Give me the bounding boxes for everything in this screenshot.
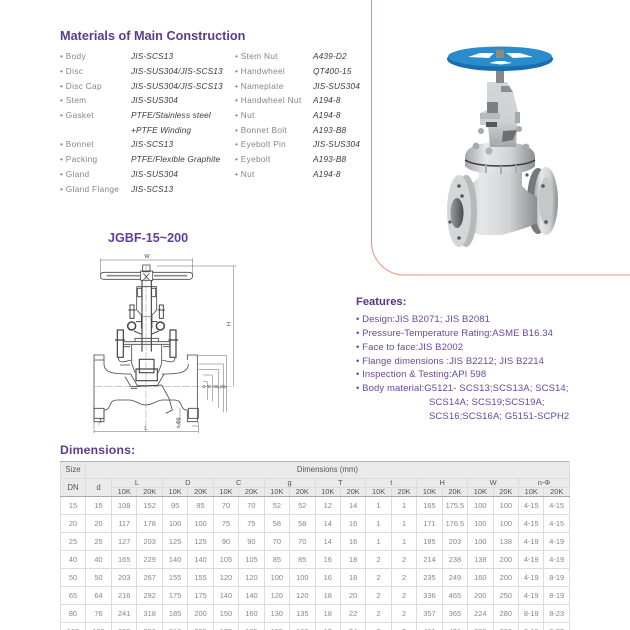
table: dimensions: 50 xyxy=(94,573,103,582)
table: dimensions: 75 xyxy=(247,519,256,528)
table: dimensions: 140 xyxy=(169,555,181,564)
table: dimensions: 10K xyxy=(169,488,182,496)
list: materials right column: • Nut xyxy=(235,110,255,120)
table: dimensions: 25 xyxy=(69,537,77,546)
list: materials left column: JIS-SCS13 xyxy=(131,184,173,194)
table: dimensions: 4-15 xyxy=(549,519,564,528)
table: dimensions: 10K xyxy=(372,488,385,496)
table: dimensions: 203 xyxy=(143,537,156,546)
table: dimensions: 76 xyxy=(94,609,103,618)
list: materials left column: • Gasket xyxy=(60,110,94,120)
table: dimensions: 20K xyxy=(550,488,563,496)
left flange xyxy=(447,175,477,247)
table: dimensions: 16 xyxy=(324,573,332,582)
table: dimensions: 15 xyxy=(69,501,77,510)
table: dimensions: 125 xyxy=(194,537,207,546)
table: dimensions: 70 xyxy=(247,501,256,510)
list: materials right column: A194-8 xyxy=(313,94,341,104)
table: dimensions: 105 xyxy=(220,555,232,564)
table: dimensions: 2 xyxy=(377,609,381,618)
table: dimensions: d xyxy=(96,483,101,492)
table: dimensions: 200 xyxy=(500,555,512,564)
table: dimensions: 4-15 xyxy=(524,519,539,528)
table: dimensions: 95 xyxy=(196,501,205,510)
table: dimensions: 365 xyxy=(449,609,461,618)
list: materials right column: A439-D2 xyxy=(313,50,347,60)
table: dimensions: 14 xyxy=(349,501,357,510)
table: dimensions: C xyxy=(236,478,241,487)
table: dimensions: 2 xyxy=(402,573,406,582)
table: dimensions: 90 xyxy=(247,537,256,546)
table: dimensions: 64 xyxy=(94,591,103,600)
table: dimensions: 100 xyxy=(474,519,487,528)
dimension labels: o xyxy=(202,385,208,388)
table: dimensions: t xyxy=(390,478,392,487)
list: materials left column: JIS-SUS304/JIS-SCS13 xyxy=(131,66,223,76)
table: dimensions: 175 xyxy=(194,591,207,600)
table: dimensions: 20K xyxy=(143,488,156,496)
table: dimensions: DN xyxy=(67,483,79,492)
table: dimensions: 108 xyxy=(118,501,130,510)
panel: product photo frame xyxy=(371,0,630,276)
table: dimensions: 20K xyxy=(347,488,360,496)
table: dimensions: 1 xyxy=(402,501,406,510)
list: materials left column: • Bonnet xyxy=(60,138,94,148)
table: dimensions: 10K xyxy=(270,488,283,496)
table: dimensions: 100 xyxy=(474,537,487,546)
list: materials left column: • Body xyxy=(60,50,86,60)
table: dimensions: 100 xyxy=(169,519,181,528)
table: dimensions: 20K xyxy=(245,488,258,496)
right flange xyxy=(525,167,558,235)
list: features: • Pressure-Temperature Rating:ASME B16.34 xyxy=(356,328,553,339)
dimension labels: L xyxy=(144,426,148,432)
table: dimensions: 40 xyxy=(69,555,77,564)
table: dimensions: 1 xyxy=(402,537,406,546)
table: dimensions: 10K xyxy=(219,488,233,496)
list: materials left column: • Stem xyxy=(60,94,86,104)
table: dimensions: 155 xyxy=(169,573,181,582)
list: materials right column: • Handwheel Nut xyxy=(235,94,301,104)
table: dimensions: 10K xyxy=(118,488,131,496)
table: dimensions: 4-19 xyxy=(549,555,564,564)
table: dimensions: 1 xyxy=(377,501,381,510)
table: dimensions: 1 xyxy=(377,519,381,528)
table: dimensions: Size xyxy=(65,465,81,474)
dimension labels: g xyxy=(212,385,218,388)
table: dimensions: 52 xyxy=(298,501,306,510)
table: dimensions: 10K xyxy=(525,488,538,496)
table: dimensions: 80 xyxy=(69,609,77,618)
list: materials right column: • Eyebolt xyxy=(235,154,271,164)
bonnet flange xyxy=(465,142,535,174)
table: dimensions: 16 xyxy=(349,519,357,528)
list: features: SCS16;SCS16A; G5151-SCPH2 xyxy=(429,411,569,422)
list: materials left column: • Disc Cap xyxy=(60,80,102,90)
table: dimensions: 20 xyxy=(94,519,103,528)
table: dimensions: 175.5 xyxy=(446,501,464,510)
table: dimensions: 18 xyxy=(349,573,357,582)
table: dimensions: 20K xyxy=(499,488,512,496)
table: dimensions: 165 xyxy=(118,555,130,564)
table: dimensions: 203 xyxy=(449,537,461,546)
dimension labels: g xyxy=(175,417,181,420)
bonnet xyxy=(115,330,178,373)
table: dimensions: 4-15 xyxy=(549,501,564,510)
table: dimensions: 18 xyxy=(324,591,332,600)
table: dimensions: 58 xyxy=(273,519,281,528)
table: dimensions: 165 xyxy=(423,501,436,510)
heading: model name: JGBF-15~200 xyxy=(108,231,188,245)
list: materials left column: +PTFE Winding xyxy=(131,124,191,134)
list: materials right column: • Nameplate xyxy=(235,80,284,90)
heading: features: Features: xyxy=(356,296,406,308)
list: materials right column: • Nut xyxy=(235,168,255,178)
packing xyxy=(136,359,157,381)
table: dimensions: H xyxy=(440,478,445,487)
table: dimensions: 216 xyxy=(118,591,130,600)
table: dimensions: 50 xyxy=(69,573,77,582)
table: dimensions: 70 xyxy=(222,501,230,510)
table: dimensions: 200 xyxy=(500,573,512,582)
table: dimensions: 2 xyxy=(402,591,406,600)
table: dimensions: 58 xyxy=(298,519,306,528)
table: dimensions: 10K xyxy=(474,488,487,496)
table: dimensions: 150 xyxy=(220,609,232,618)
dimension labels: W xyxy=(144,254,150,260)
stem xyxy=(496,68,504,83)
table: dimensions: 100 xyxy=(500,501,512,510)
table: dimensions: 250 xyxy=(500,591,512,600)
table: dimensions: 2 xyxy=(402,555,406,564)
table: dimensions: 100 xyxy=(271,573,283,582)
heading: materials: Materials of Main Construction xyxy=(60,29,245,43)
table: dimensions: 100 xyxy=(194,519,207,528)
table: dimensions: 8-23 xyxy=(549,609,564,618)
table: dimensions: 200 xyxy=(474,591,487,600)
table: dimensions: 185 xyxy=(423,537,436,546)
table: dimensions: 20K xyxy=(296,488,309,496)
table: dimensions: 140 xyxy=(194,555,207,564)
list: materials right column: A194-8 xyxy=(313,168,341,178)
table: dimensions: 4-15 xyxy=(524,501,539,510)
table: dimensions: 138 xyxy=(500,537,512,546)
table: dimensions: 20 xyxy=(349,591,357,600)
table: dimensions: 130 xyxy=(271,609,283,618)
table: dimensions: 125 xyxy=(169,537,181,546)
table: dimensions: 185 xyxy=(169,609,181,618)
table: dimensions: 90 xyxy=(222,537,230,546)
table: dimensions: 65 xyxy=(69,591,77,600)
technical drawing xyxy=(94,254,237,434)
list: materials left column: • Gland xyxy=(60,168,89,178)
list: materials left column: • Gland Flange xyxy=(60,184,119,194)
table: dimensions: 100 xyxy=(474,501,487,510)
yoke xyxy=(478,82,522,147)
table: dimensions: 95 xyxy=(171,501,179,510)
table: dimensions: 357 xyxy=(423,609,436,618)
table: dimensions: 10K xyxy=(321,488,334,496)
table: dimensions: 14 xyxy=(324,537,332,546)
list: materials left column: • Packing xyxy=(60,154,97,164)
list: features: • Flange dimensions :JIS B2212; JIS B2214 xyxy=(356,356,544,367)
dimension labels: T xyxy=(99,419,102,425)
list: materials left column: PTFE/Stainless steel xyxy=(131,110,211,120)
table: dimensions: 52 xyxy=(273,501,281,510)
table: dimensions: 120 xyxy=(271,591,283,600)
table: dimensions: 152 xyxy=(143,501,156,510)
table: dimensions: 214 xyxy=(423,555,436,564)
table: dimensions: 14 xyxy=(324,519,332,528)
list: materials right column: JIS-SUS304 xyxy=(313,138,360,148)
table: dimensions: 85 xyxy=(273,555,281,564)
yoke and stem xyxy=(137,280,157,352)
table: dimensions: 178 xyxy=(143,519,156,528)
list: materials right column: A193-B8 xyxy=(313,154,346,164)
table: dimensions: 120 xyxy=(245,573,258,582)
dimension labels: C xyxy=(217,384,223,388)
list: features: SCS14A; SCS19;SCS19A; xyxy=(429,397,545,408)
table: dimensions: 238 xyxy=(449,555,461,564)
table: dimensions: T xyxy=(338,478,343,487)
centre lines xyxy=(95,265,232,432)
table: dimensions: L xyxy=(135,478,139,487)
table: dimensions: 229 xyxy=(143,555,156,564)
heading: dimensions: Dimensions: xyxy=(60,443,135,457)
dimension labels: d xyxy=(207,385,213,388)
table: dimensions: 2 xyxy=(377,573,381,582)
table: dimensions: 75 xyxy=(222,519,230,528)
list: features: • Design:JIS B2071; JIS B2081 xyxy=(356,314,490,325)
table: dimensions: 318 xyxy=(143,609,156,618)
dimension labels: D xyxy=(221,384,227,388)
table: dimensions: 176.5 xyxy=(446,519,464,528)
table: dimensions: 20K xyxy=(448,488,461,496)
table: dimensions: 8-19 xyxy=(549,591,564,600)
table: dimensions: 20K xyxy=(397,488,411,496)
table: dimensions: 16 xyxy=(349,537,357,546)
list: materials left column: JIS-SCS13 xyxy=(131,138,173,148)
table: dimensions: 4-19 xyxy=(524,573,539,582)
table: dimensions: 18 xyxy=(349,555,357,564)
table: dimensions: 292 xyxy=(143,591,156,600)
table: dimensions: Dimensions (mm) xyxy=(297,465,358,474)
table: dimensions: 100 xyxy=(296,573,308,582)
dimension lines xyxy=(94,258,237,433)
list: materials right column: • Handwheel xyxy=(235,66,285,76)
table: dimensions: 16 xyxy=(324,555,332,564)
list: materials right column: A193-B8 xyxy=(313,124,346,134)
table: dimensions: 22 xyxy=(349,609,357,618)
table: dimensions: 20K xyxy=(194,488,207,496)
table: dimensions: 224 xyxy=(474,609,487,618)
table: dimensions: 160 xyxy=(245,609,258,618)
table: dimensions: g xyxy=(288,478,292,487)
list: materials right column: QT400-15 xyxy=(313,66,351,76)
list: features: • Inspection & Testing:API 598 xyxy=(356,369,486,380)
table: dimensions: 12 xyxy=(324,501,332,510)
gland bolts xyxy=(128,305,165,334)
table: dimensions: D xyxy=(185,478,190,487)
table: dimensions: 4-19 xyxy=(524,591,539,600)
table: dimensions: 175 xyxy=(169,591,181,600)
list: materials left column: JIS-SUS304 xyxy=(131,168,178,178)
table: dimensions: 18 xyxy=(324,609,332,618)
table: dimensions: 4-19 xyxy=(524,537,539,546)
table: dimensions: 4-19 xyxy=(524,555,539,564)
list: materials left column: JIS-SUS304/JIS-SCS13 xyxy=(131,80,223,90)
table: dimensions: 10K xyxy=(423,488,436,496)
table: dimensions: 127 xyxy=(118,537,130,546)
table: dimensions: 241 xyxy=(118,609,130,618)
table: dimensions: 105 xyxy=(245,555,258,564)
table: dimensions: W xyxy=(490,478,497,487)
list: materials left column: JIS-SUS304 xyxy=(131,94,178,104)
table: dimensions: 160 xyxy=(474,573,487,582)
list: materials right column: • Stem Nut xyxy=(235,50,278,60)
table: dimensions: 140 xyxy=(245,591,258,600)
dimension labels xyxy=(99,254,232,432)
table: dimensions: n-Φ xyxy=(538,478,550,487)
list: materials right column: A194-8 xyxy=(313,110,341,120)
table: dimensions: 20 xyxy=(69,519,77,528)
table: dimensions: 100 xyxy=(500,519,512,528)
table: dimensions: 203 xyxy=(118,573,130,582)
valve body outline xyxy=(94,355,198,422)
list: materials right column: • Bonnet Bolt xyxy=(235,124,287,134)
table: dimensions: 2 xyxy=(402,609,406,618)
dimension labels: n-Φ xyxy=(176,420,182,429)
illustration: valve photo xyxy=(447,46,558,247)
table: dimensions: 8-19 xyxy=(549,573,564,582)
table: dimensions: 280 xyxy=(500,609,512,618)
valve body xyxy=(456,172,537,235)
table: dimensions: 135 xyxy=(296,609,308,618)
dimension labels: H xyxy=(226,322,232,326)
table: dimensions: 2 xyxy=(377,591,381,600)
handwheel xyxy=(447,46,553,71)
list: materials left column xyxy=(60,50,223,194)
table: dimensions: 1 xyxy=(402,519,406,528)
table: dimensions: 267 xyxy=(143,573,156,582)
table: dimensions: 140 xyxy=(220,591,232,600)
list: materials right column xyxy=(235,50,360,178)
table: dimensions: 70 xyxy=(298,537,306,546)
table: dimensions: 249 xyxy=(449,573,461,582)
list: features: • Face to face:JIS B2002 xyxy=(356,342,463,353)
handwheel xyxy=(100,265,193,280)
list: features xyxy=(356,314,569,422)
table: dimensions: 465 xyxy=(449,591,461,600)
table: dimensions: 171 xyxy=(423,519,436,528)
table: dimensions: 155 xyxy=(194,573,207,582)
list: materials left column: PTFE/Flexible Graphite xyxy=(131,154,220,164)
table: dimensions: 25 xyxy=(94,537,103,546)
list: materials left column: JIS-SCS13 xyxy=(131,50,173,60)
table: dimensions xyxy=(60,461,570,630)
table: dimensions: 85 xyxy=(298,555,306,564)
list: materials left column: • Disc xyxy=(60,66,83,76)
list: materials right column: JIS-SUS304 xyxy=(313,80,360,90)
table: dimensions: 15 xyxy=(94,501,103,510)
table: dimensions: 117 xyxy=(118,519,130,528)
table: dimensions: 8-19 xyxy=(524,609,539,618)
table: dimensions: 70 xyxy=(273,537,281,546)
list: features: • Body material:G5121- SCS13;SCS13A; SCS14; xyxy=(356,383,569,394)
list: materials right column: • Eyebolt Pin xyxy=(235,138,286,148)
table: dimensions: 120 xyxy=(296,591,308,600)
table: dimensions: 235 xyxy=(423,573,436,582)
table: dimensions: 4-19 xyxy=(549,537,564,546)
table: dimensions: 2 xyxy=(377,555,381,564)
table: dimensions: 120 xyxy=(220,573,232,582)
table: dimensions: 1 xyxy=(377,537,381,546)
table: dimensions: 200 xyxy=(194,609,207,618)
table: dimensions: 336 xyxy=(423,591,436,600)
table: dimensions: 40 xyxy=(94,555,103,564)
table: dimensions: 138 xyxy=(474,555,487,564)
